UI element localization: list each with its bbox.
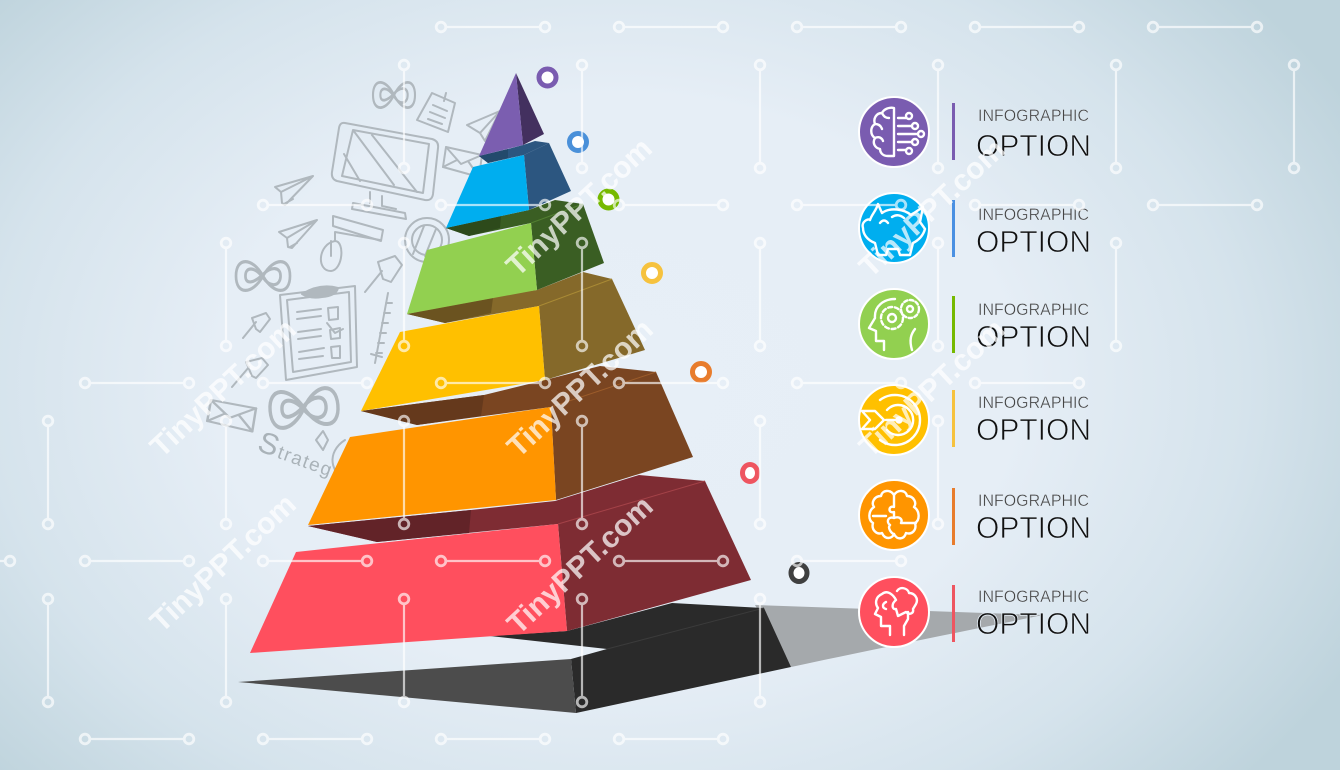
tier: orange	[308, 366, 693, 525]
icon: piggy bank	[859, 193, 929, 263]
label	[976, 393, 1091, 447]
label: INFOGRAPHIC	[978, 205, 1089, 224]
doodle: sparkle	[316, 431, 328, 450]
option 1	[859, 97, 1091, 167]
doodle: push pin large	[365, 256, 402, 292]
icon: puzzle brain	[859, 480, 929, 550]
label	[976, 205, 1091, 259]
dot: orange	[692, 364, 710, 380]
tier: blue	[446, 141, 571, 228]
doodle: round badge	[405, 218, 449, 262]
doodle: push pin two	[232, 358, 268, 387]
dot: green	[600, 191, 617, 208]
doodle: mouse	[321, 232, 380, 271]
label: OPTION	[976, 128, 1091, 163]
doodle: note page	[417, 93, 455, 132]
watermark centre middle: TinyPPT.com	[501, 313, 660, 464]
doodle: push pin one	[243, 313, 270, 338]
icon: brain circuit	[859, 97, 929, 167]
option 4	[859, 385, 1091, 455]
watermark centre top: TinyPPT.com	[500, 132, 659, 283]
accent bar	[952, 390, 955, 447]
dot: purple	[539, 69, 556, 86]
dot: yellow	[644, 264, 660, 282]
label	[976, 300, 1091, 354]
label: OPTION	[976, 412, 1091, 447]
doodle: strategy lettering: Strategy	[254, 426, 350, 487]
ground shadow	[755, 605, 1043, 667]
accent bar	[952, 103, 955, 160]
watermarks	[144, 132, 1012, 641]
option 5	[859, 480, 1091, 550]
doodle: paper plane three	[467, 111, 500, 141]
tier: red	[250, 475, 751, 653]
watermark left lower: TinyPPT.com	[144, 488, 303, 639]
label: INFOGRAPHIC	[978, 491, 1089, 510]
tier: purple tip	[479, 73, 544, 156]
background doodles	[207, 82, 500, 487]
watermark right top: TinyPPT.com	[853, 133, 1012, 284]
label: OPTION	[976, 510, 1091, 545]
watermark centre lower: TinyPPT.com	[501, 490, 660, 641]
accent bar	[952, 488, 955, 545]
option list	[859, 97, 1091, 647]
doodle: monitor	[332, 123, 438, 241]
level marker dots	[539, 69, 807, 582]
label: INFOGRAPHIC	[978, 300, 1089, 319]
icon: head with puzzle	[859, 577, 929, 647]
label: OPTION	[976, 224, 1091, 259]
label	[976, 587, 1091, 641]
label	[976, 491, 1091, 545]
doodle: paper plane one	[275, 176, 313, 205]
option 3	[859, 289, 1091, 359]
label: OPTION	[976, 606, 1091, 641]
dot: blue	[570, 134, 586, 150]
pyramid	[238, 73, 791, 713]
doodle: paper plane two	[279, 220, 317, 248]
doodle: envelope lower	[207, 400, 256, 432]
doodle: envelope top	[443, 147, 482, 177]
label: INFOGRAPHIC	[978, 587, 1089, 606]
doodle: infinity top	[373, 82, 415, 108]
accent bar	[952, 296, 955, 353]
doodle: arc	[333, 440, 348, 478]
option 2	[859, 193, 1091, 263]
label: INFOGRAPHIC	[978, 393, 1089, 412]
label: INFOGRAPHIC	[978, 106, 1089, 125]
accent bar	[952, 200, 955, 257]
watermark left upper: TinyPPT.com	[144, 313, 303, 464]
label	[976, 106, 1091, 163]
accent bar	[952, 585, 955, 642]
label: OPTION	[976, 319, 1091, 354]
dot: black	[791, 564, 807, 582]
doodle: clipboard	[280, 286, 357, 380]
tier: yellow	[361, 272, 645, 411]
icon: target with arrow	[859, 385, 929, 455]
tier: black base	[238, 603, 791, 713]
watermark right middle: TinyPPT.com	[853, 313, 1012, 464]
doodle: infinity left	[236, 262, 290, 290]
tier: green	[407, 200, 604, 314]
icon: head with gears	[859, 289, 929, 359]
doodle: ruler	[371, 293, 392, 363]
option 6	[859, 577, 1091, 647]
doodle: infinity lower	[269, 387, 339, 429]
dot: red	[742, 464, 758, 482]
